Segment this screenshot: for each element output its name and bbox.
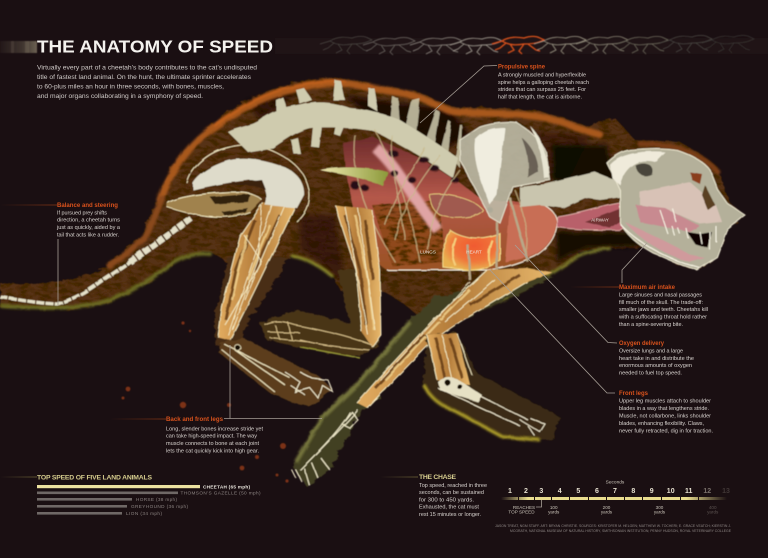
organ labels: HEART: [466, 250, 482, 254]
the chase text: Top speed, reached in three: [419, 483, 487, 489]
credits: JASON TREAT, NGM STAFF. ART: BRYAN CHRISTIE. SOURCES: KRISTOFER M. HELGEN; MATTHEW W. TOCHERI; E. GRACE VEATCH; KIERSTIN J.: [495, 524, 731, 528]
the chase text: rest 15 minutes or longer.: [419, 512, 481, 518]
timeline numbers: 13: [722, 488, 730, 495]
rear foot: [218, 338, 333, 407]
callout: propulsive spine: [420, 64, 589, 123]
timeline numbers: 11: [685, 488, 693, 495]
callout: back and front legs: can take high-speed impact. The way: [166, 434, 257, 440]
yard markers: yards: [601, 510, 613, 515]
yard markers: yards: [654, 510, 666, 515]
intro text: Virtually every part of a cheetah’s body contributes to the cat’s undisputed: [37, 64, 257, 72]
callout: back and front legs: lets the cat quickly kick into high gear.: [166, 448, 259, 454]
yard markers: yards: [707, 510, 719, 515]
reaches top speed marker: REACHES: [513, 505, 535, 510]
skull: [607, 148, 745, 270]
yard markers: yards: [548, 510, 560, 515]
yard markers: 400: [709, 505, 717, 510]
callout: maximum air intake: Large sinuses and nasal passages: [619, 292, 702, 298]
leg to forward hind foot: [260, 205, 381, 358]
timeline numbers: 2: [524, 488, 528, 495]
callout: balance and steering: tail that acts like a rudder.: [57, 232, 119, 238]
organ labels: LUNGS: [420, 250, 436, 254]
timeline numbers: 12: [703, 488, 711, 495]
yard markers: [548, 505, 719, 515]
callout: front legs: blades, enhancing flexibility. Claws,: [619, 421, 704, 427]
yard markers: 100: [550, 505, 558, 510]
callout: oxygen delivery: Oxygen delivery: [619, 341, 665, 347]
intro text: and major organs collaborating in a symphony of speed.: [37, 93, 203, 100]
callout: front legs: Front legs: [619, 391, 649, 397]
neck vertebrae: [520, 172, 630, 208]
title band: [0, 41, 37, 53]
credits: [495, 524, 732, 533]
bar: cheetah: [37, 485, 250, 490]
callout: back and front legs: Back and front legs: [166, 417, 224, 423]
callout: front legs: blades in a way that lengthens stride.: [619, 406, 709, 412]
callout: balance and steering: direction, a cheetah turns: [57, 218, 120, 224]
timeline numbers: 4: [558, 488, 562, 495]
callout: balance and steering: [0, 203, 120, 305]
intro text: [37, 64, 257, 100]
reaches top speed marker: [508, 500, 542, 515]
timeline numbers: 1: [508, 488, 512, 495]
timeline bar: [501, 496, 727, 501]
bar: greyhound: GREYHOUND (36 mph): [131, 504, 188, 509]
title: THE ANATOMY OF SPEED: [37, 37, 273, 57]
callout: propulsive spine: spine helps a galloping cheetah reach: [498, 80, 589, 86]
callout: oxygen delivery: enormous amounts of oxygen: [619, 363, 692, 369]
pelvis: [167, 145, 309, 222]
bar: cheetah: CHEETAH (65 mph): [203, 485, 250, 490]
callout: back and front legs: Long, slender bones increase stride yet: [166, 426, 264, 432]
callout: propulsive spine: A strongly muscled and hyperflexible: [498, 72, 586, 78]
spine with vertebral processes: [228, 80, 462, 178]
hind leg: tibia and muscle: [214, 203, 297, 348]
callout: front legs: Muscle, not collarbone, links shoulder: [619, 414, 711, 420]
intro text: to 60-plus miles an hour in three seconds, with bones, muscles,: [37, 84, 224, 90]
bar: gazelle: THOMSON’S GAZELLE (50 mph): [180, 491, 261, 496]
callout: front legs: never fully retracted, dig in for traction.: [619, 428, 713, 434]
tail vertebrae: [0, 218, 192, 304]
lungs: [343, 130, 557, 270]
bar: lion: [37, 511, 162, 516]
bar chart: top speed of five land animals: TOP SPEED OF FIVE LAND ANIMALS: [37, 474, 152, 482]
the chase text: for 300 to 450 yards.: [419, 498, 474, 504]
callout: oxygen delivery: Oversize lungs and a large: [619, 348, 683, 354]
front leg reaching forward: [292, 268, 553, 487]
callout: front legs: Upper leg muscles attach to shoulder: [619, 398, 711, 404]
callout: maximum air intake: Maximum air intake: [619, 285, 676, 291]
the chase text: [380, 474, 487, 518]
the chase text: seconds, can be sustained: [419, 490, 484, 496]
organ labels: AIRWAY: [591, 218, 609, 222]
timeline numbers: 9: [650, 488, 654, 495]
callout: maximum air intake: fill much of the skull. The trade-off:: [619, 300, 703, 306]
timeline numbers: [508, 488, 730, 495]
shoulder blade: [460, 122, 550, 280]
bar: lion: LION (34 mph): [126, 511, 162, 516]
bar chart: top speed of five land animals: [0, 474, 261, 516]
callout: propulsive spine: half that length, the cat is airborne.: [498, 94, 582, 100]
yard markers: 300: [656, 505, 664, 510]
intro text: title of fastest land animal. On the hunt, the ultimate sprinter accelerates: [37, 74, 252, 81]
timeline numbers: 5: [576, 488, 580, 495]
callout: oxygen delivery: [515, 245, 694, 377]
timeline: seconds: [501, 480, 730, 515]
timeline numbers: 6: [595, 488, 599, 495]
callout: maximum air intake: with a suffocating throat hold rather: [618, 314, 707, 320]
callout: back and front legs: [110, 345, 322, 454]
yard markers: 200: [603, 505, 611, 510]
callout: balance and steering: If pursued prey shifts: [57, 210, 107, 216]
callout: back and front legs: muscle connects to bone at each joint: [166, 441, 260, 447]
heart: [443, 230, 500, 270]
callout: maximum air intake: [570, 243, 708, 328]
callout: maximum air intake: smaller jaws and teeth. Cheetahs kill: [619, 307, 708, 313]
bar: horse: HORSE (38 mph): [136, 497, 177, 502]
timeline numbers: 10: [667, 488, 675, 495]
icon: highlighted orange cheetah: [492, 36, 544, 54]
callout: propulsive spine: Propulsive spine: [498, 64, 546, 70]
running cheetah sequence: [275, 36, 768, 55]
callout: oxygen delivery: needed to fuel top speed.: [619, 371, 682, 377]
humerus blade: [320, 168, 388, 186]
cheetah anatomy illustration: [0, 78, 745, 487]
timeline numbers: 8: [631, 488, 635, 495]
callout: maximum air intake: than a spine-severing bite.: [619, 322, 683, 328]
callout: front legs: [490, 270, 713, 434]
the chase text: Exhausted, the cat must: [419, 505, 479, 511]
callout: balance and steering: just as quickly, aided by a: [56, 225, 120, 231]
blood droplets: [122, 321, 289, 483]
credits: MCGRATH, NATIONAL MUSEUM OF NATURAL HISTORY, SMITHSONIAN INSTITUTION; PENNY HUDSON, ROYAL VETERINARY COLLEGE: [510, 529, 732, 533]
fur silhouette: [0, 78, 745, 325]
callout: oxygen delivery: heart take in and distribute the: [619, 356, 694, 362]
timeline: seconds: Seconds: [606, 480, 625, 486]
airway: [557, 203, 637, 230]
the chase text: THE CHASE: [419, 474, 456, 481]
orange fur highlights: [2, 81, 718, 322]
callout: propulsive spine: strides that can surpass 25 feet. For: [498, 87, 586, 93]
reaches top speed marker: TOP SPEED: [508, 510, 535, 515]
timeline numbers: 7: [613, 488, 617, 495]
front leg folded back: [423, 333, 560, 440]
dark neck and chest shadows: [245, 92, 645, 285]
timeline numbers: 3: [539, 488, 543, 495]
callout: balance and steering: Balance and steering: [57, 203, 118, 209]
organ labels: [420, 218, 609, 254]
